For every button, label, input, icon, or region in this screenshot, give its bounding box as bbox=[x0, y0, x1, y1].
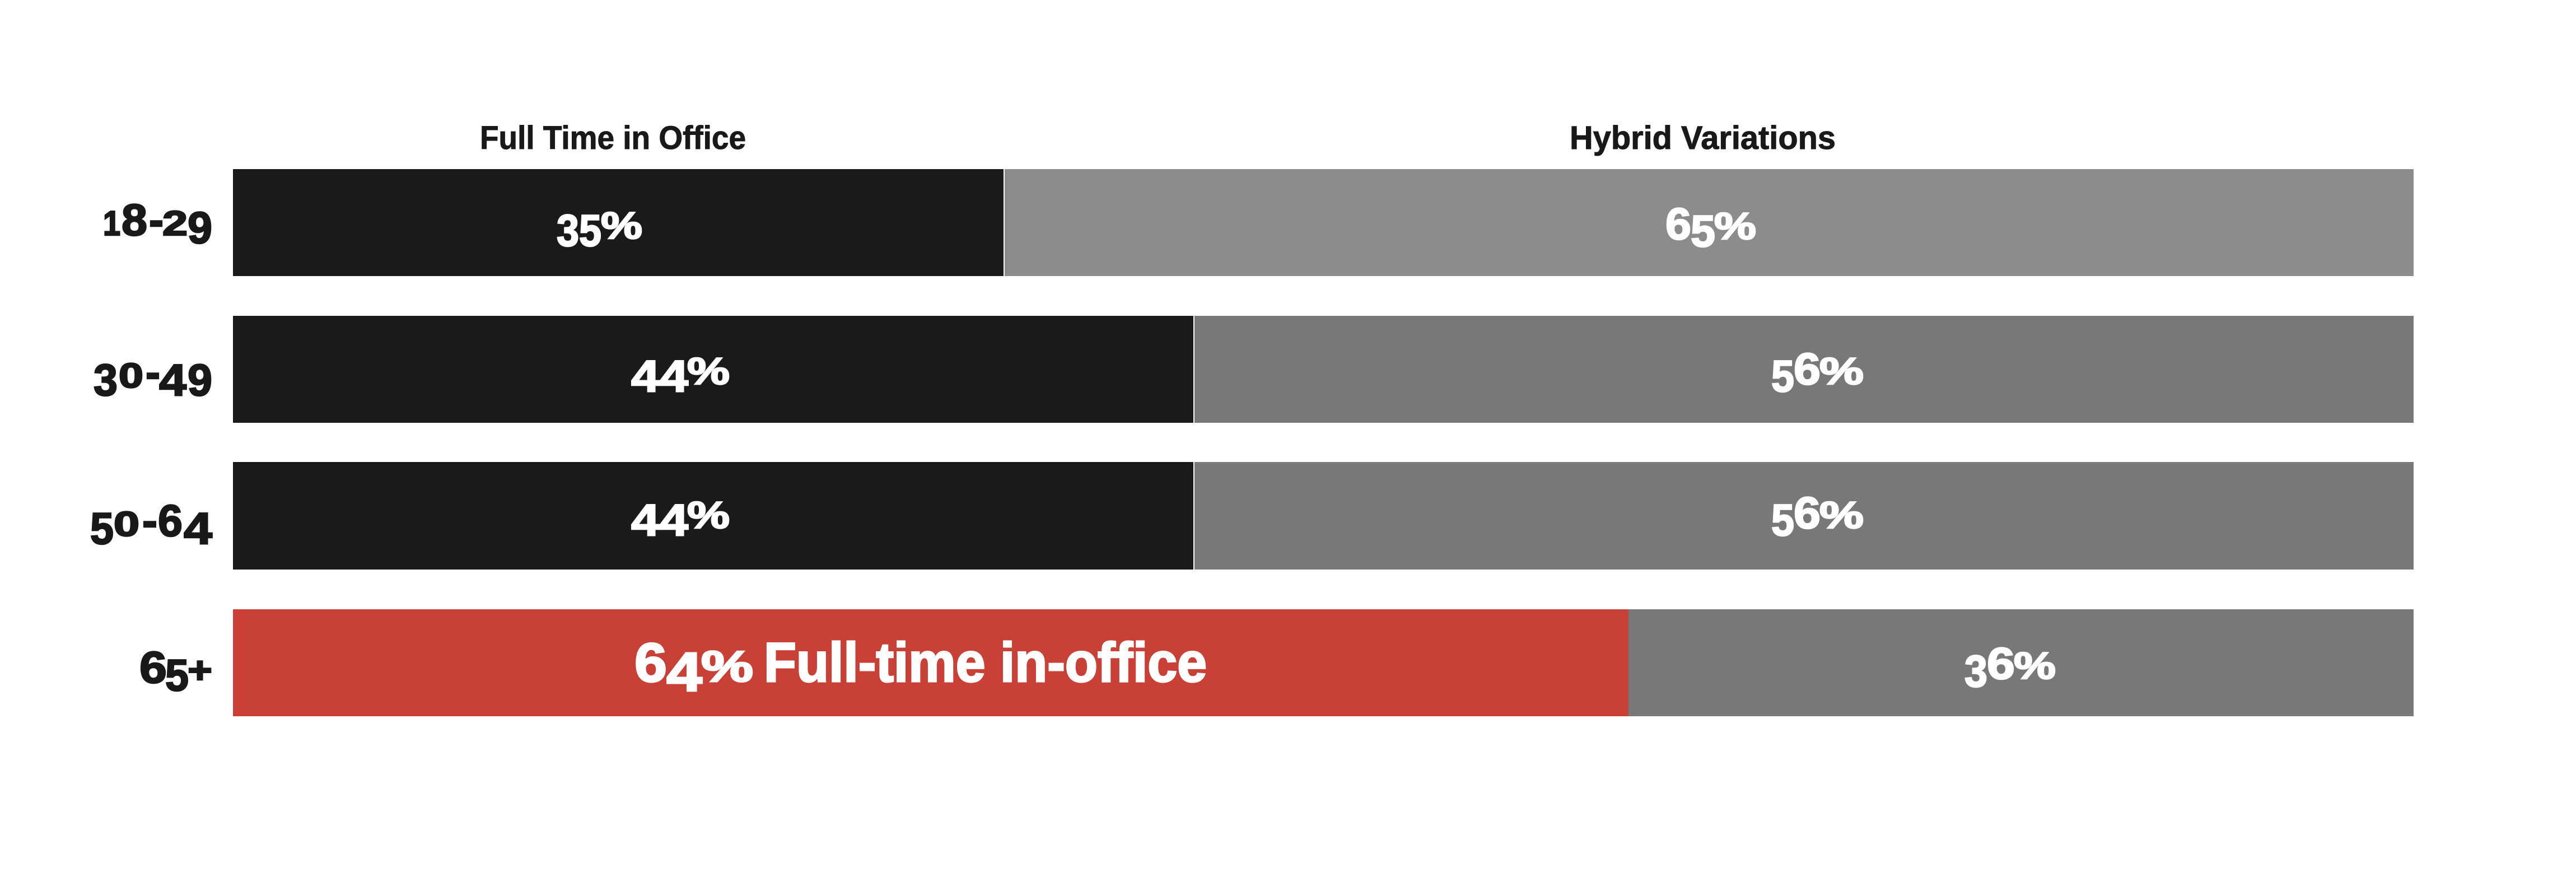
value 64% full-time in-office: 6 bbox=[634, 632, 667, 693]
age label 50-64: 4 bbox=[184, 503, 213, 553]
value 64% full-time in-office bbox=[634, 631, 1207, 703]
value 56% bbox=[1771, 488, 1864, 545]
age label 50-64: - bbox=[142, 496, 157, 545]
bar segment: full time 64% highlighted bbox=[233, 609, 1628, 716]
age label 30-49: - bbox=[146, 347, 160, 397]
value 56% bbox=[1771, 344, 1864, 401]
age label 50-64: 0 bbox=[114, 505, 139, 544]
heading: full time in office: Full Time in Office bbox=[480, 120, 746, 156]
value 65%: % bbox=[1714, 205, 1756, 248]
value 35% bbox=[557, 204, 642, 255]
age label 50-64 bbox=[90, 496, 213, 553]
value 44%: % bbox=[687, 494, 730, 536]
age label 18-29: 2 bbox=[162, 204, 188, 243]
value 64% full-time in-office: 4 bbox=[666, 641, 702, 703]
value 64% full-time in-office: Full-time in-office bbox=[764, 631, 1207, 693]
bar segment: hybrid 65% bbox=[1005, 169, 2414, 276]
bar segment: full time 44% bbox=[233, 462, 1193, 570]
row: 18-29 bbox=[103, 169, 2414, 276]
value 64% full-time in-office: % bbox=[701, 642, 753, 691]
value 56%: 6 bbox=[1794, 488, 1821, 538]
value 56%: % bbox=[1819, 494, 1864, 536]
age label 18-29: 8 bbox=[122, 195, 147, 245]
value 36%: 3 bbox=[1964, 646, 1987, 696]
value 56%: % bbox=[1819, 350, 1864, 393]
age label 30-49 bbox=[94, 347, 212, 405]
age label 65+: + bbox=[188, 649, 212, 690]
bar segment: hybrid 56% bbox=[1194, 316, 2414, 423]
row: 65+ bbox=[139, 609, 2414, 716]
bar segment: full time 35% bbox=[233, 169, 1004, 276]
age label 30-49: 0 bbox=[119, 357, 143, 395]
value 65%: 6 bbox=[1665, 199, 1691, 249]
age label 18-29: 9 bbox=[188, 203, 212, 253]
age label 18-29: - bbox=[149, 195, 164, 245]
value 36% bbox=[1964, 638, 2056, 696]
age label 65+: 5 bbox=[165, 650, 189, 700]
value 35%: 35 bbox=[557, 206, 601, 255]
value 44%: 44 bbox=[631, 351, 689, 401]
value 56%: 5 bbox=[1771, 495, 1794, 545]
value 44% bbox=[631, 350, 730, 401]
age label 50-64: 5 bbox=[90, 503, 114, 553]
bar segment: hybrid 56% bbox=[1194, 462, 2414, 570]
row: 50-64 bbox=[90, 462, 2414, 570]
age label 18-29: 1 bbox=[103, 204, 120, 243]
age label 65+ bbox=[139, 642, 212, 700]
value 56%: 5 bbox=[1771, 351, 1794, 401]
value 35%: % bbox=[601, 204, 642, 247]
bar segment: full time 44% bbox=[233, 316, 1193, 423]
value 65% bbox=[1665, 199, 1756, 256]
value 56%: 6 bbox=[1794, 344, 1821, 394]
age label 50-64: 6 bbox=[158, 496, 183, 545]
age label 30-49: 3 bbox=[94, 355, 118, 405]
heading: hybrid variations: Hybrid Variations bbox=[1570, 120, 1836, 156]
age label 18-29 bbox=[103, 195, 212, 253]
value 44%: 44 bbox=[631, 495, 689, 545]
column headings bbox=[480, 120, 1836, 156]
value 65%: 5 bbox=[1691, 206, 1715, 256]
value 36%: % bbox=[2014, 645, 2056, 687]
value 44%: % bbox=[687, 350, 730, 393]
age label 65+: 6 bbox=[139, 642, 167, 692]
age label 30-49: 9 bbox=[188, 355, 212, 405]
row: 30-49 bbox=[94, 316, 2414, 423]
age label 30-49: 4 bbox=[159, 355, 187, 405]
bar segment: hybrid 36% bbox=[1628, 609, 2414, 716]
value 44% bbox=[631, 494, 730, 545]
value 36%: 6 bbox=[1987, 638, 2015, 688]
